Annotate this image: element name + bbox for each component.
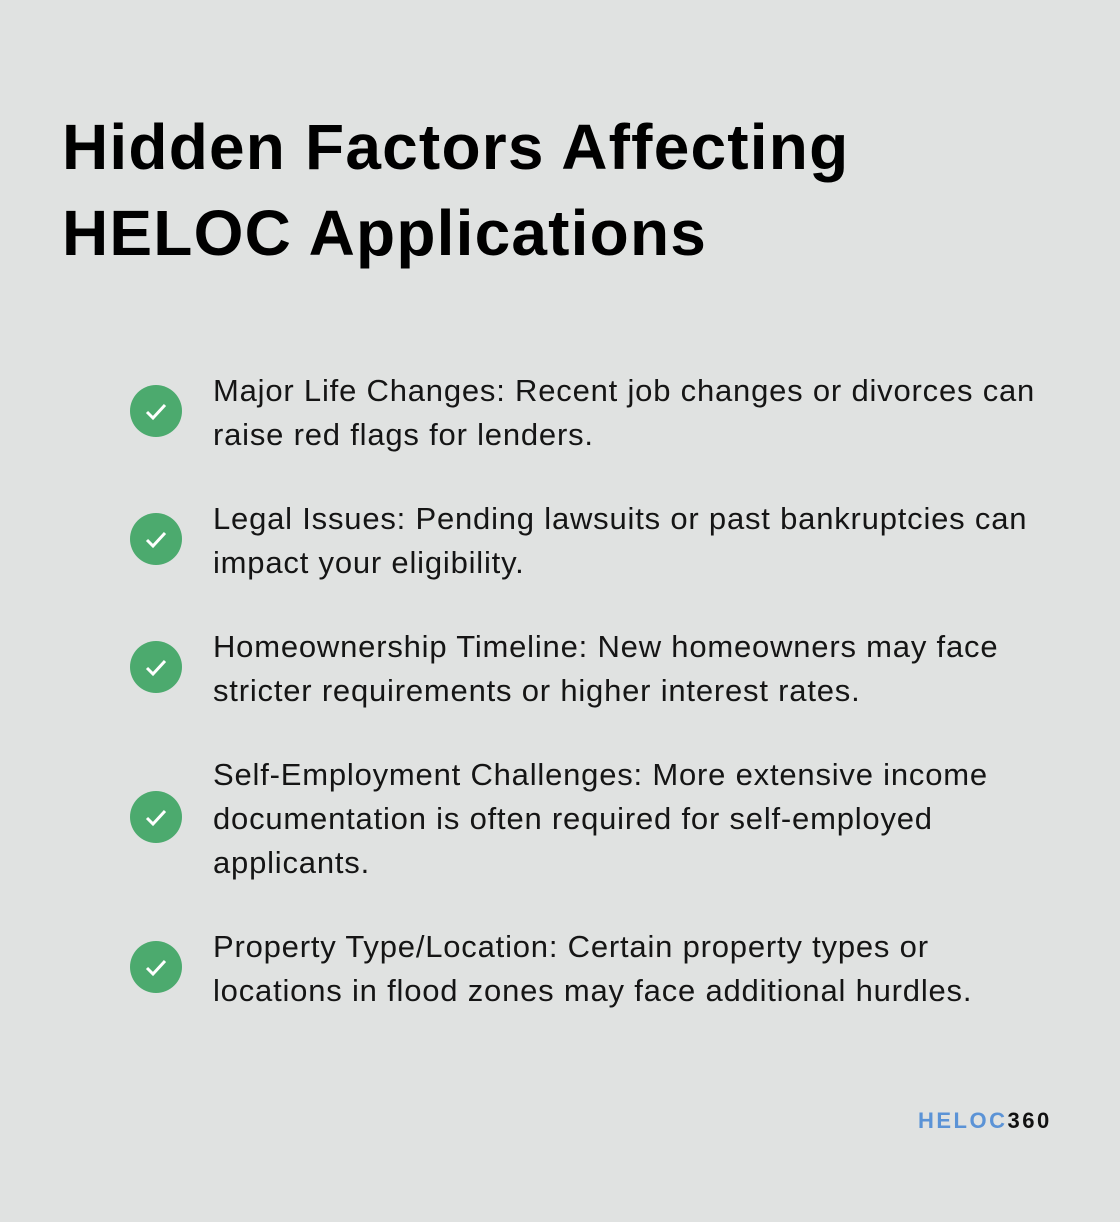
title <box>62 111 849 269</box>
icon: check <box>130 941 182 993</box>
item: legal issues <box>130 501 1027 580</box>
logo: HELOC360 <box>918 1108 1052 1133</box>
item: major life changes <box>130 373 1035 452</box>
icon: check <box>130 385 182 437</box>
text <box>213 629 998 708</box>
title: Hidden Factors Affecting <box>62 111 849 183</box>
item: property type <box>130 929 972 1008</box>
item: self-employment <box>130 757 988 880</box>
text: locations in flood zones may face additional hurdles. <box>213 973 972 1008</box>
text: impact your eligibility. <box>213 545 525 580</box>
text: Homeownership Timeline: New homeowners may face <box>213 629 998 664</box>
text <box>213 373 1035 452</box>
icon: check <box>130 513 182 565</box>
text: raise red flags for lenders. <box>213 417 594 452</box>
text: Major Life Changes: Recent job changes or divorces can <box>213 373 1035 408</box>
text <box>213 501 1027 580</box>
item: homeownership timeline <box>130 629 998 708</box>
icon: check <box>130 641 182 693</box>
text: Legal Issues: Pending lawsuits or past bankruptcies can <box>213 501 1027 536</box>
text: applicants. <box>213 845 370 880</box>
title: HELOC Applications <box>62 197 707 269</box>
icon: check <box>130 791 182 843</box>
text: stricter requirements or higher interest rates. <box>213 673 861 708</box>
text <box>213 757 988 880</box>
text: Property Type/Location: Certain property types or <box>213 929 929 964</box>
text: Self-Employment Challenges: More extensive income <box>213 757 988 792</box>
text <box>213 929 972 1008</box>
text: documentation is often required for self-employed <box>213 801 933 836</box>
